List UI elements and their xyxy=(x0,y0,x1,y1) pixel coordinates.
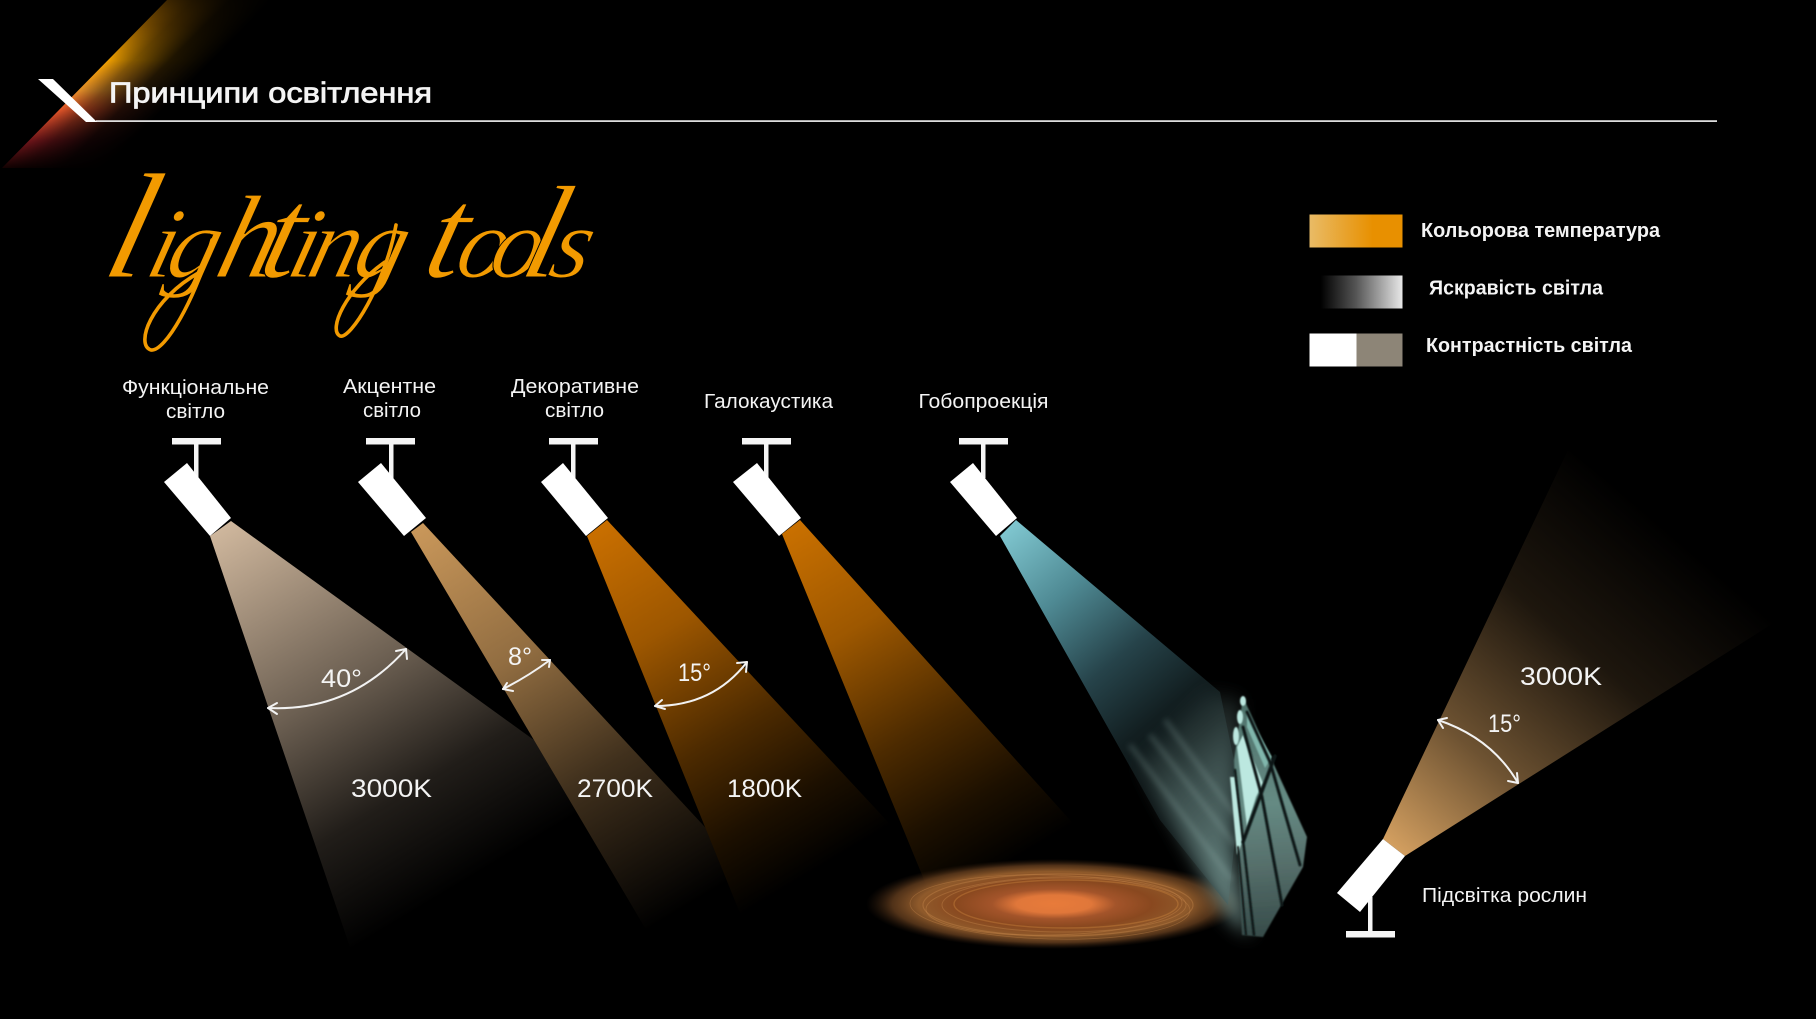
legend label: colour temperature: Кольорова температура xyxy=(1421,219,1661,242)
angle value: 40 degrees: 40° xyxy=(321,665,362,693)
label: functional light: Функціональне xyxy=(122,377,269,399)
label: plant lighting: Підсвітка рослин xyxy=(1422,885,1587,907)
gobo rays xyxy=(1130,720,1235,880)
label: halocaustics: Галокаустика xyxy=(704,391,834,413)
lamp 1 xyxy=(164,438,231,536)
handwritten heading: t xyxy=(412,161,490,305)
handwritten heading: l xyxy=(510,160,586,306)
label: accent light: Акцентне xyxy=(343,376,436,398)
legend label: contrast: Контрастність світла xyxy=(1426,334,1633,357)
legend xyxy=(1310,214,1661,366)
label: functional light: світло xyxy=(166,401,225,423)
handwritten heading: s xyxy=(540,189,609,300)
handwritten heading: h xyxy=(205,172,299,303)
colour temperature value: 2700K: 2700K xyxy=(577,775,653,803)
handwritten heading: i xyxy=(278,189,335,300)
handwritten heading: n xyxy=(298,189,378,300)
label: functional light xyxy=(122,377,269,423)
gobo window projection xyxy=(1230,696,1307,937)
handwritten heading: l xyxy=(91,144,177,310)
lamp 6: plant uplight xyxy=(1337,839,1405,938)
handwritten heading: i xyxy=(137,189,194,300)
label: decorative light: Декоративне xyxy=(511,376,639,398)
caustic light pool xyxy=(866,859,1242,949)
label: accent light: світло xyxy=(363,400,421,422)
angle value: 8 degrees: 8° xyxy=(508,643,532,671)
colour temperature value: 3000K: 3000K xyxy=(351,775,432,803)
light beam: halocaustics xyxy=(782,520,1124,960)
handwritten heading: g xyxy=(344,189,424,300)
label: decorative light: світло xyxy=(545,400,604,422)
legend swatch: brightness xyxy=(1310,276,1402,308)
window mullions xyxy=(1235,712,1300,935)
angle arrow 40 xyxy=(268,649,407,714)
legend swatch: contrast xyxy=(1310,334,1402,366)
light beam: gobo projection xyxy=(1000,520,1307,937)
label: gobo projection: Гобопроекція xyxy=(918,391,1048,413)
handwritten heading: o xyxy=(480,189,560,300)
upper right window pane xyxy=(1247,713,1272,768)
colour temperature value: right 3000K: 3000K xyxy=(1520,663,1602,691)
handwritten heading: g xyxy=(157,189,237,300)
colour temperature value: 1800K: 1800K xyxy=(727,775,802,803)
light beam: accent 2700K xyxy=(411,523,754,960)
lamp 4 xyxy=(733,438,801,536)
label: decorative light xyxy=(511,376,639,422)
label: accent light xyxy=(343,376,436,422)
heading swash: descender loops xyxy=(145,225,396,350)
title: Принципи освітлення xyxy=(109,78,432,110)
lamp 3 xyxy=(541,438,608,536)
light beam: decorative 1800K xyxy=(587,520,942,960)
lamp 5 xyxy=(950,438,1017,536)
angle value: right 15 degrees: 15° xyxy=(1488,710,1521,738)
handwritten heading xyxy=(91,144,620,350)
header logo glow xyxy=(2,0,231,168)
light beam: plant uplight xyxy=(1383,450,1780,856)
header rule xyxy=(96,120,1717,122)
handwritten heading: o xyxy=(446,189,526,300)
angle value: 15 degrees: 15° xyxy=(678,659,711,687)
legend label: brightness: Яскравість світла xyxy=(1429,276,1604,300)
angle arrow 15 xyxy=(655,662,747,709)
bright window panes xyxy=(1230,696,1263,855)
angle arrow 8 xyxy=(503,660,550,691)
angle arrow 15 right xyxy=(1438,718,1518,783)
light beam: functional 3000K xyxy=(210,521,700,1000)
legend swatch: colour temperature xyxy=(1310,214,1402,248)
lamp labels xyxy=(122,376,1048,423)
handwritten heading: t xyxy=(248,161,326,305)
lamp 2 xyxy=(358,438,426,536)
logo mark xyxy=(38,79,97,122)
gobo volumetric haze xyxy=(1140,690,1250,936)
